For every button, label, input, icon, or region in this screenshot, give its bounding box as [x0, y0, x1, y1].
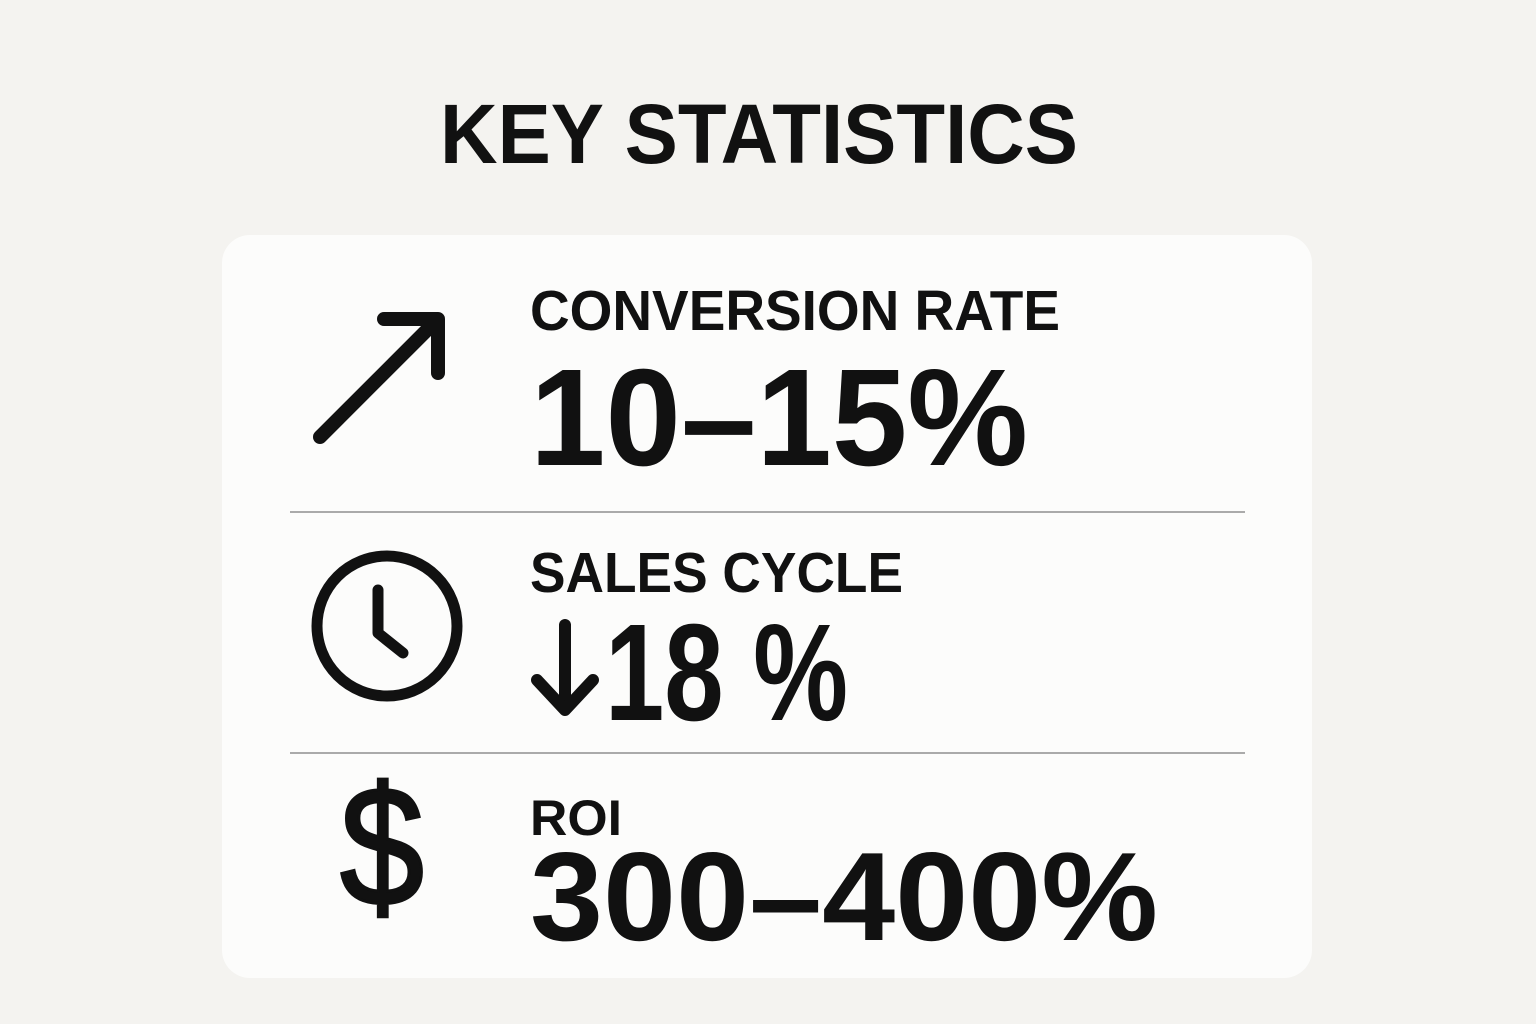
row: sales cycle	[317, 541, 903, 750]
row: conversion rate	[320, 279, 1060, 495]
row: ROI	[340, 752, 1158, 967]
icon: clock	[317, 556, 457, 696]
icon: dollar sign: $	[340, 752, 424, 942]
icon: up-right arrow	[320, 319, 438, 437]
label: conversion rate: CONVERSION RATE	[530, 279, 1060, 343]
value: 300-400%: 300–400%	[530, 826, 1158, 967]
label: sales cycle: SALES CYCLE	[530, 541, 903, 605]
label: ROI: ROI	[530, 790, 622, 846]
panel: statistics card	[222, 235, 1312, 978]
value: down 18%: 18 %	[605, 596, 848, 750]
value: down 18%	[537, 596, 848, 750]
title: KEY STATISTICS	[440, 87, 1078, 181]
value: 10-15%: 10–15%	[530, 341, 1028, 495]
